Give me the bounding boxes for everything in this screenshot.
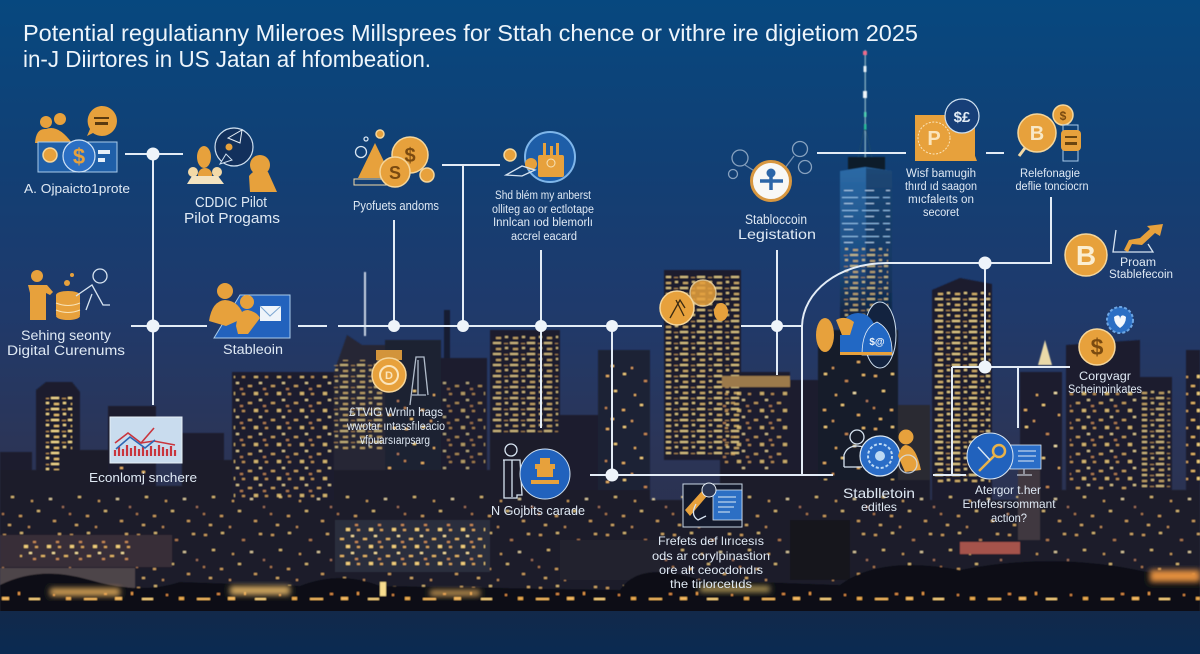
icon and label: enforcement actions [962,433,1056,525]
waterfront lights [0,570,1200,612]
icon and label: stablecoin team [209,283,290,357]
icon and label: opening prompt: $ [73,144,85,169]
lit windows [46,275,1200,556]
icon and label: coin badge: vfpuarsıarpsarg [360,435,430,447]
icon and label: CBDC pilot programs: CDDIC Pilot [195,195,267,211]
icon and label: CBDC pilot programs: Pilot Progams [184,211,280,227]
icon and label: third-stage mandates: $£ [954,109,971,126]
icon and label: bitcoin stablecoin: Proam [1120,257,1156,269]
low-rise blocks [0,470,1040,590]
icon and label: relationship and ledger [1016,105,1088,193]
icon and label: policy plug: Innlcan ıod blemorlı [493,217,593,229]
icon and label: reporting monitor: ods ar corylpinastion [652,549,770,563]
icon and label: reporting monitor: ore alt ceocdondıs [659,563,763,577]
chart card: economy: Econlomj snchere [89,470,197,485]
main glass tower [840,157,892,330]
icon and label: policy plug [492,132,594,243]
icon and label: stablecoin entities: Stablletoin [843,485,915,501]
icon and label: relationship and ledger: $ [1060,109,1067,123]
icon and label: digital currencies: Sehing seonty [21,328,111,343]
icon and label: opening prompt [24,106,130,196]
icon and label: third-stage mandates: secoret [923,207,960,219]
icon and label: bitcoin stablecoin [1065,224,1173,281]
icon and label: enforcement actions: Enfefesrsommant [962,497,1056,511]
icon and label: stablecoin team: Stableoin [223,342,283,357]
icon and label: policy plug: Shd blém my anberst [495,190,592,202]
icon and label: coin badge: wwotar ıntassfıleacio [346,421,445,433]
icon and label: regulator: N Gojbits carade [491,504,585,518]
icon and label: relationship and ledger: B [1030,123,1044,145]
icon and label: products and coins: $ [404,145,416,167]
icon and label: enforcement actions: action? [991,511,1027,525]
icon and label: policy plug: olliteg ao or ectlotape [492,204,594,216]
icon and label: products and coins: Pyofuets andoms [353,199,439,213]
icon and label: products and coins [353,130,439,213]
water [0,611,1200,654]
icon and label: company certificates: $ [1091,334,1104,360]
icon and label: reporting monitor: Frefets def lırıcesıs [658,534,764,548]
rear tower row [0,270,1200,575]
icon and label: relationship and ledger: deflie tonciocrn [1016,181,1088,193]
icon and label: third-stage mandates [905,99,979,219]
title [23,20,918,72]
icon and label: stablecoin entities: editles [861,500,897,514]
icon and label: bitcoin stablecoin: B [1076,240,1096,271]
icon and label: enforcement actions: Atergor t.her [975,483,1041,497]
icon and label: third-stage mandates: P [927,128,941,150]
coin cluster [660,280,728,325]
icon and label: third-stage mandates: Wisf bamugih [906,168,976,180]
icon and label: regulator [491,444,585,518]
icon and label: reporting monitor: the tirlorcetıds [670,577,752,591]
icon and label: third-stage mandates: mıcfaleıts on [908,194,974,206]
mid-rise base [0,440,1200,606]
icon and label: third-stage mandates: thırd ıd saagon [905,181,977,193]
title: in-J Diirtores in US Jatan af hfombeation. [23,46,431,72]
icon and label: stablecoin legislation: Legistation [738,226,816,242]
icon and label: coin badge [346,350,445,447]
icon and label: company certificates [1068,307,1142,396]
icon and label: opening prompt: A. Ojpaicto1prote [24,181,130,196]
icon and label: company certificates: Corgvagr [1079,371,1131,383]
icon and label: policy plug: accrel eacard [511,231,577,243]
icon and label: digital currencies [7,269,125,358]
waterfront trees [0,561,1200,606]
timeline connector lines [125,148,1070,482]
bank and coin cluster [816,302,896,368]
icon and label: stablecoin legislation [728,142,816,242]
icon and label: reporting monitor [652,483,770,591]
icon and label: coin badge: £TVIG Wrnln hags [349,407,443,419]
icon and label: company certificates: Scheinpinkates [1068,384,1142,396]
icon and label: stablecoin legislation: Stabloccoin [745,212,807,227]
chart card: economy [89,417,197,485]
icon and label: CBDC pilot programs [184,128,280,227]
icon and label: products and coins: S [389,163,401,183]
bank and coin cluster: $@ [869,337,885,348]
icon and label: digital currencies: Digital Curenums [7,343,125,358]
icon and label: relationship and ledger: Relefonagie [1020,168,1080,180]
icon and label: stablecoin entities [843,430,921,514]
title: Potential regulatianny Mileroes Millsprees for Sttah chence or vithre ire digietiom 2025 [23,20,918,46]
icon and label: coin badge: D [385,370,393,382]
spires [364,50,872,360]
icon and label: bitcoin stablecoin: Stablefecoin [1109,269,1173,281]
